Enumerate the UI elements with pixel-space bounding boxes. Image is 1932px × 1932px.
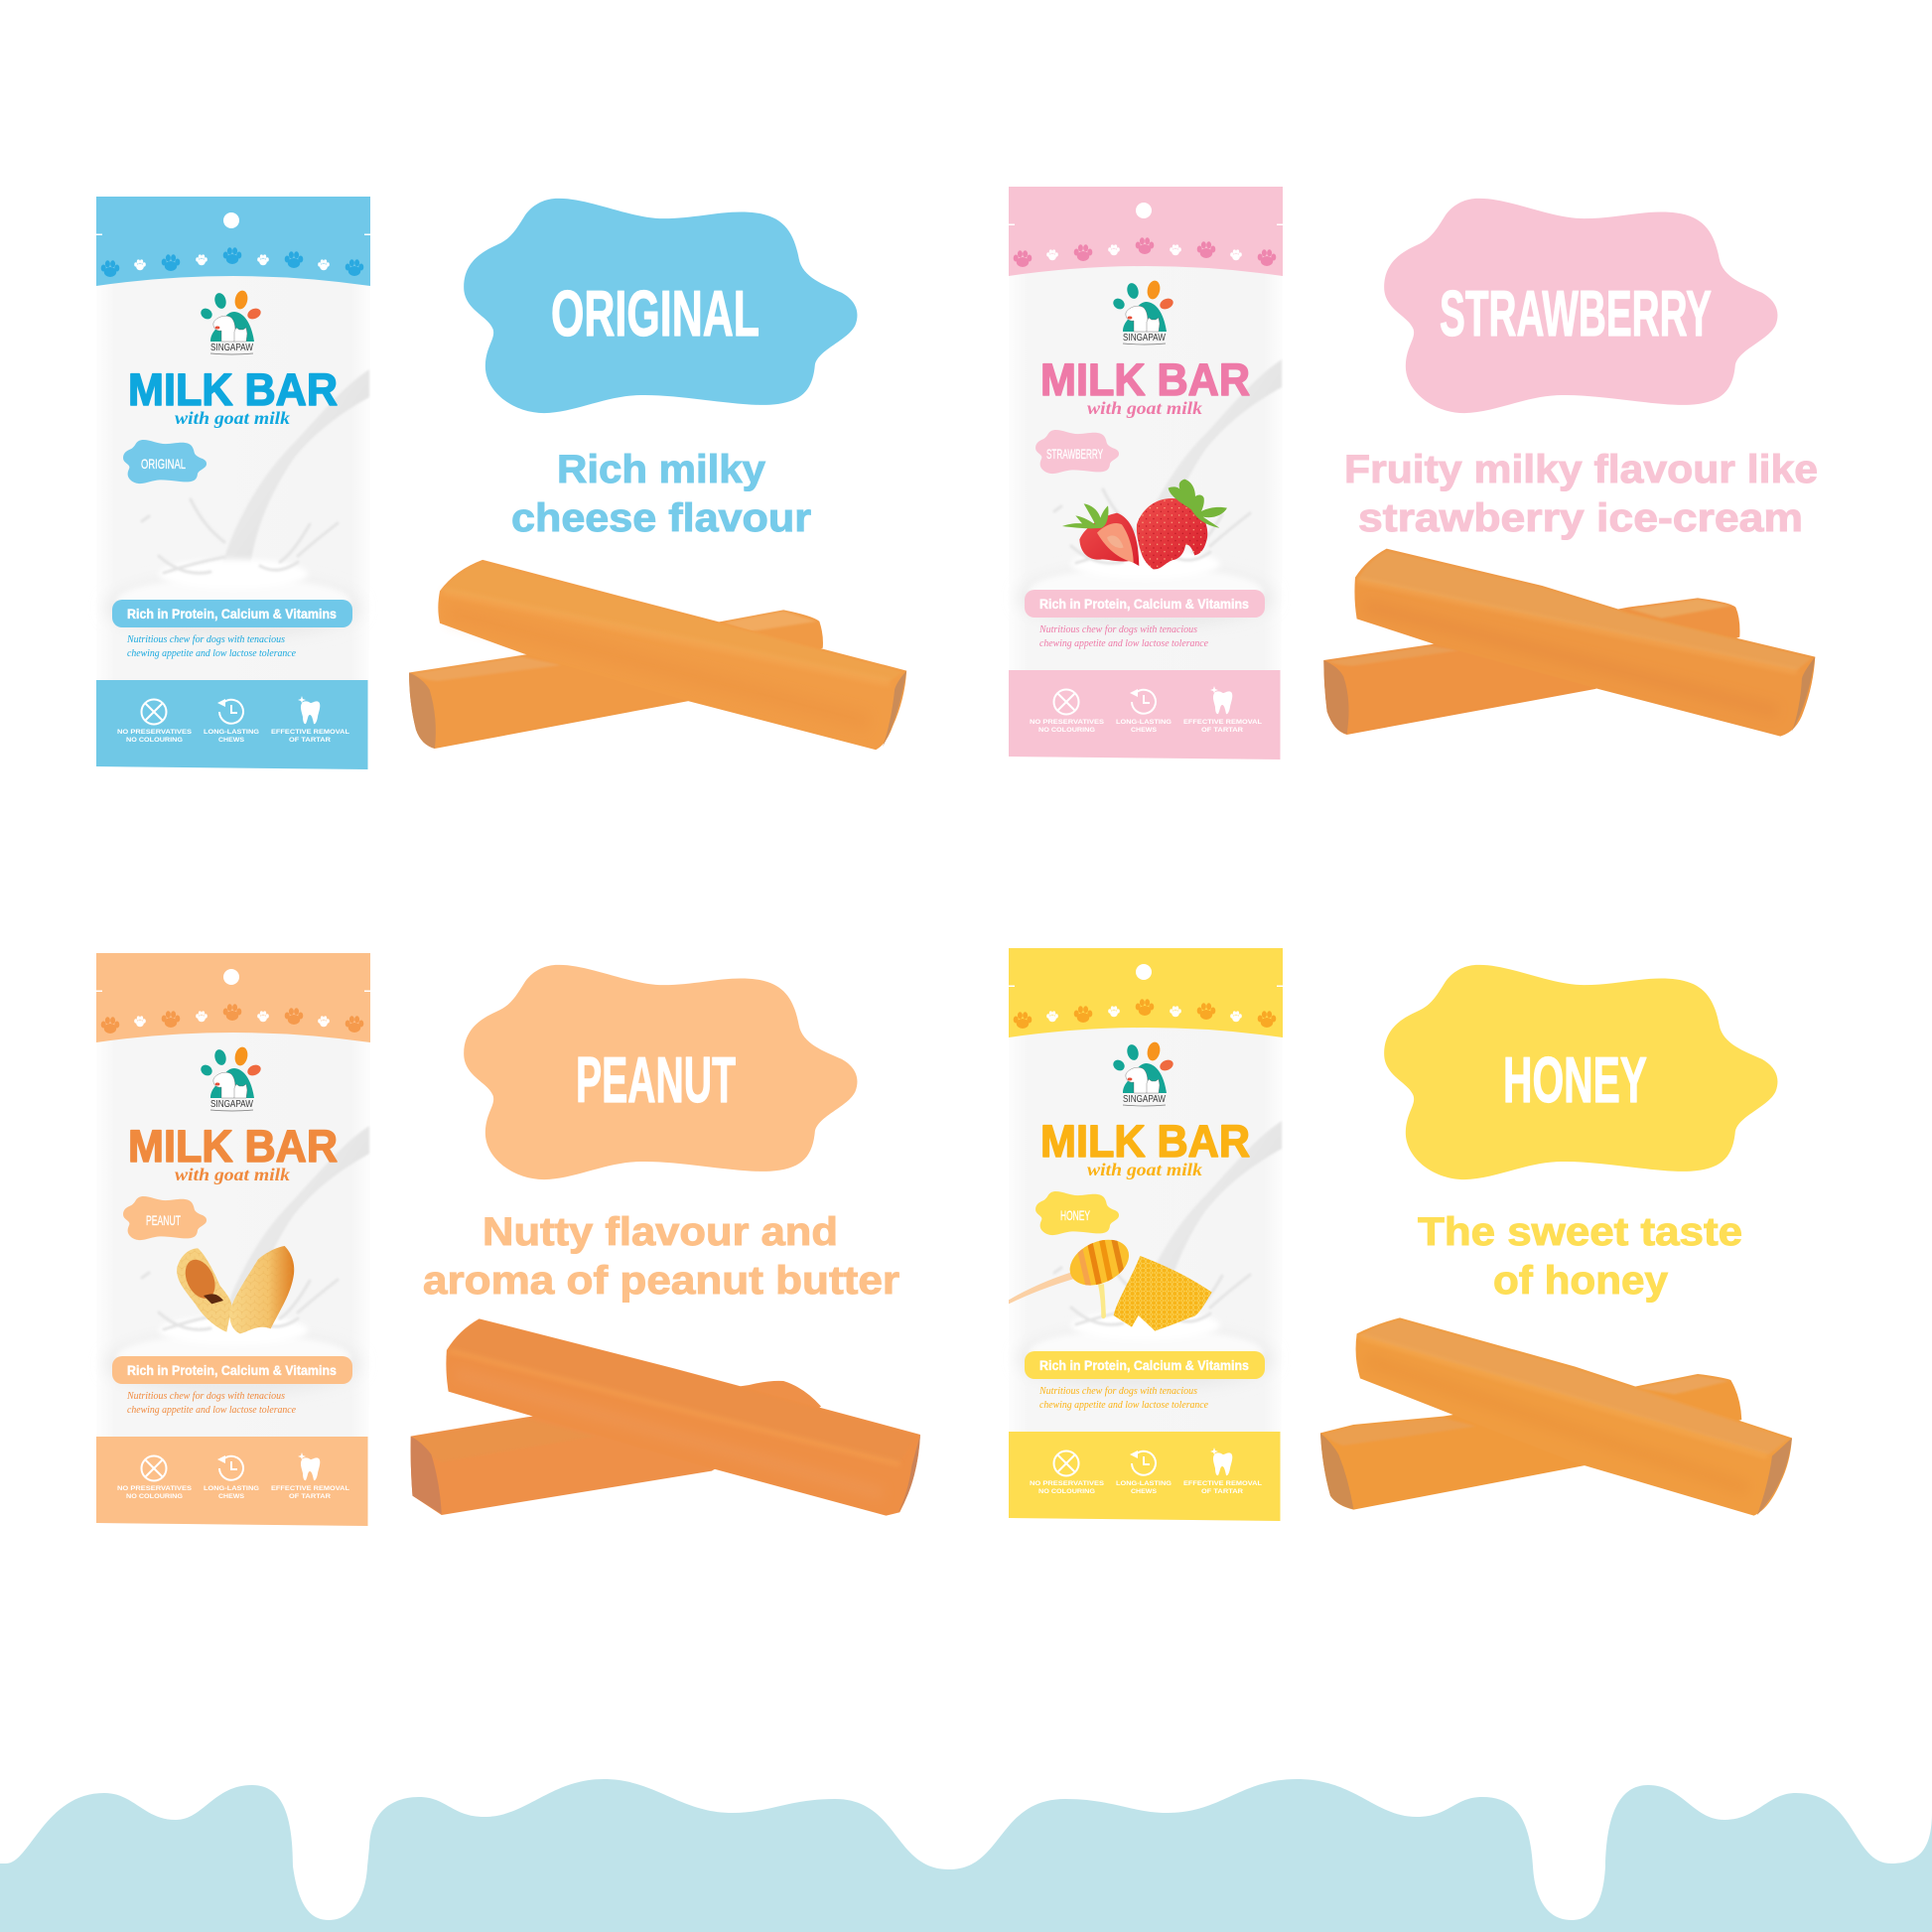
bottom band — [96, 1437, 367, 1526]
subtitle: with goat milk — [175, 1165, 290, 1184]
description: honey — [1418, 1210, 1742, 1303]
feature labels: NO PRESERVATIVES — [117, 729, 192, 736]
feature icons — [141, 1452, 320, 1481]
description: chewing appetite and low lactose tolerance — [127, 1405, 296, 1416]
brand logo — [199, 289, 262, 354]
feature labels: OF TARTAR — [289, 737, 331, 744]
panel: peanut pouch — [96, 953, 370, 1526]
description: Nutritious chew for dogs with tenacious — [126, 1391, 285, 1402]
flavour tag — [1035, 430, 1119, 474]
description: Nutritious chew for dogs with tenacious — [1038, 624, 1197, 635]
feature icons — [141, 696, 320, 725]
product title: MILK BAR — [128, 364, 338, 415]
feature labels: CHEWS — [1131, 1488, 1157, 1495]
feature labels — [1030, 719, 1262, 734]
flavour blob: strawberry: STRAWBERRY — [1440, 277, 1712, 349]
pouch top band — [96, 953, 370, 1042]
description — [1038, 1386, 1208, 1411]
flavour blob: peanut — [464, 965, 857, 1179]
chews: strawberry — [1323, 549, 1815, 737]
benefit pill: Rich in Protein, Calcium & Vitamins — [1039, 1358, 1249, 1373]
feature labels: NO COLOURING — [1038, 1488, 1095, 1495]
paw prints — [1009, 224, 1283, 267]
description: strawberry: Fruity milky flavour like — [1344, 448, 1818, 491]
flavour blob: peanut: PEANUT — [576, 1043, 736, 1116]
description: peanut: aroma of peanut butter — [423, 1259, 899, 1303]
feature labels: CHEWS — [218, 737, 244, 744]
feature labels: OF TARTAR — [1201, 727, 1243, 734]
bottom band — [96, 680, 367, 769]
feature labels: NO PRESERVATIVES — [1030, 719, 1104, 726]
description: peanut: Nutty flavour and — [483, 1210, 838, 1254]
feature labels: EFFECTIVE REMOVAL — [271, 1485, 349, 1492]
peanut illustration — [177, 1246, 294, 1333]
flavour blob: original: ORIGINAL — [551, 277, 759, 349]
chews: peanut — [411, 1318, 920, 1516]
hang hole — [1136, 203, 1152, 218]
subtitle: with goat milk — [1087, 1160, 1202, 1179]
hang hole — [223, 212, 239, 228]
subtitle: with goat milk — [175, 408, 290, 428]
feature labels: NO COLOURING — [126, 1493, 183, 1500]
paw prints — [96, 234, 370, 277]
benefit pill — [1025, 590, 1265, 618]
feature icons — [1054, 1448, 1232, 1475]
description: chewing appetite and low lactose tolerance — [1039, 1400, 1208, 1411]
hang hole — [223, 969, 239, 985]
pouch top band — [1009, 948, 1283, 1037]
feature labels: NO COLOURING — [1038, 727, 1095, 734]
product title: MILK BAR — [1040, 354, 1250, 405]
honey illustration — [1009, 1231, 1212, 1331]
feature labels: LONG-LASTING — [1116, 719, 1172, 726]
benefit pill — [112, 600, 352, 627]
feature labels: OF TARTAR — [289, 1493, 331, 1500]
description: honey: of honey — [1493, 1259, 1669, 1303]
feature labels: CHEWS — [1131, 727, 1157, 734]
benefit pill: Rich in Protein, Calcium & Vitamins — [127, 607, 337, 621]
hang hole — [1136, 964, 1152, 980]
description: peanut — [423, 1210, 899, 1303]
feature labels: CHEWS — [218, 1493, 244, 1500]
brand logo — [1111, 1040, 1174, 1106]
panel: strawberry pouch — [1009, 187, 1283, 759]
flavour tag: HONEY — [1060, 1207, 1090, 1223]
milk drip footer — [0, 1779, 1932, 1932]
pouch top band — [1009, 187, 1283, 276]
panel: original pouch — [96, 197, 370, 769]
description: Nutritious chew for dogs with tenacious — [1038, 1386, 1197, 1397]
subtitle: with goat milk — [1087, 398, 1202, 418]
description: original — [511, 448, 811, 540]
feature labels: EFFECTIVE REMOVAL — [1183, 1480, 1262, 1487]
panel: honey pouch — [1009, 948, 1283, 1521]
bottom band — [1009, 1432, 1281, 1521]
benefit pill — [1025, 1351, 1265, 1379]
flavour blob: original — [464, 199, 857, 413]
benefit pill — [112, 1356, 352, 1384]
description: chewing appetite and low lactose tolerance — [1039, 638, 1208, 649]
description: chewing appetite and low lactose tolerance — [127, 648, 296, 659]
pouch top band — [96, 197, 370, 286]
feature labels: OF TARTAR — [1201, 1488, 1243, 1495]
feature icons — [1054, 686, 1232, 715]
flavour tag — [1035, 1191, 1119, 1235]
feature labels: LONG-LASTING — [204, 1485, 259, 1492]
description: honey: The sweet taste — [1418, 1210, 1742, 1254]
description: original: cheese flavour — [511, 496, 811, 540]
paw prints — [96, 991, 370, 1034]
brand logo — [199, 1045, 262, 1111]
feature labels: NO COLOURING — [126, 737, 183, 744]
feature labels: LONG-LASTING — [204, 729, 259, 736]
product title: MILK BAR — [128, 1121, 338, 1172]
feature labels: NO PRESERVATIVES — [1030, 1480, 1104, 1487]
chews: honey — [1320, 1317, 1792, 1516]
feature labels: NO PRESERVATIVES — [117, 1485, 192, 1492]
feature labels: EFFECTIVE REMOVAL — [271, 729, 349, 736]
feature labels: LONG-LASTING — [1116, 1480, 1172, 1487]
description: strawberry — [1344, 448, 1818, 540]
flavour tag — [123, 1196, 207, 1240]
description — [1038, 624, 1208, 649]
flavour blob: honey — [1384, 965, 1777, 1179]
paw prints — [1009, 985, 1283, 1029]
feature labels — [117, 1485, 349, 1500]
flavour blob: honey: HONEY — [1503, 1043, 1647, 1116]
description — [126, 634, 296, 659]
product title: MILK BAR — [1040, 1116, 1250, 1167]
description — [126, 1391, 296, 1416]
brand logo — [1111, 279, 1174, 345]
flavour tag: PEANUT — [146, 1212, 181, 1228]
benefit pill: Rich in Protein, Calcium & Vitamins — [127, 1363, 337, 1378]
flavour tag: ORIGINAL — [141, 456, 186, 472]
feature labels — [1030, 1480, 1262, 1495]
feature labels: EFFECTIVE REMOVAL — [1183, 719, 1262, 726]
description: original: Rich milky — [557, 448, 766, 491]
strawberry illustration — [1062, 480, 1227, 569]
chews: original — [409, 560, 906, 750]
flavour tag: STRAWBERRY — [1046, 446, 1103, 462]
bottom band — [1009, 670, 1281, 759]
flavour blob: strawberry — [1384, 199, 1777, 413]
flavour tag — [123, 440, 207, 483]
benefit pill: Rich in Protein, Calcium & Vitamins — [1039, 597, 1249, 612]
feature labels — [117, 729, 349, 744]
description: Nutritious chew for dogs with tenacious — [126, 634, 285, 645]
description: strawberry: strawberry ice-cream — [1358, 496, 1803, 540]
